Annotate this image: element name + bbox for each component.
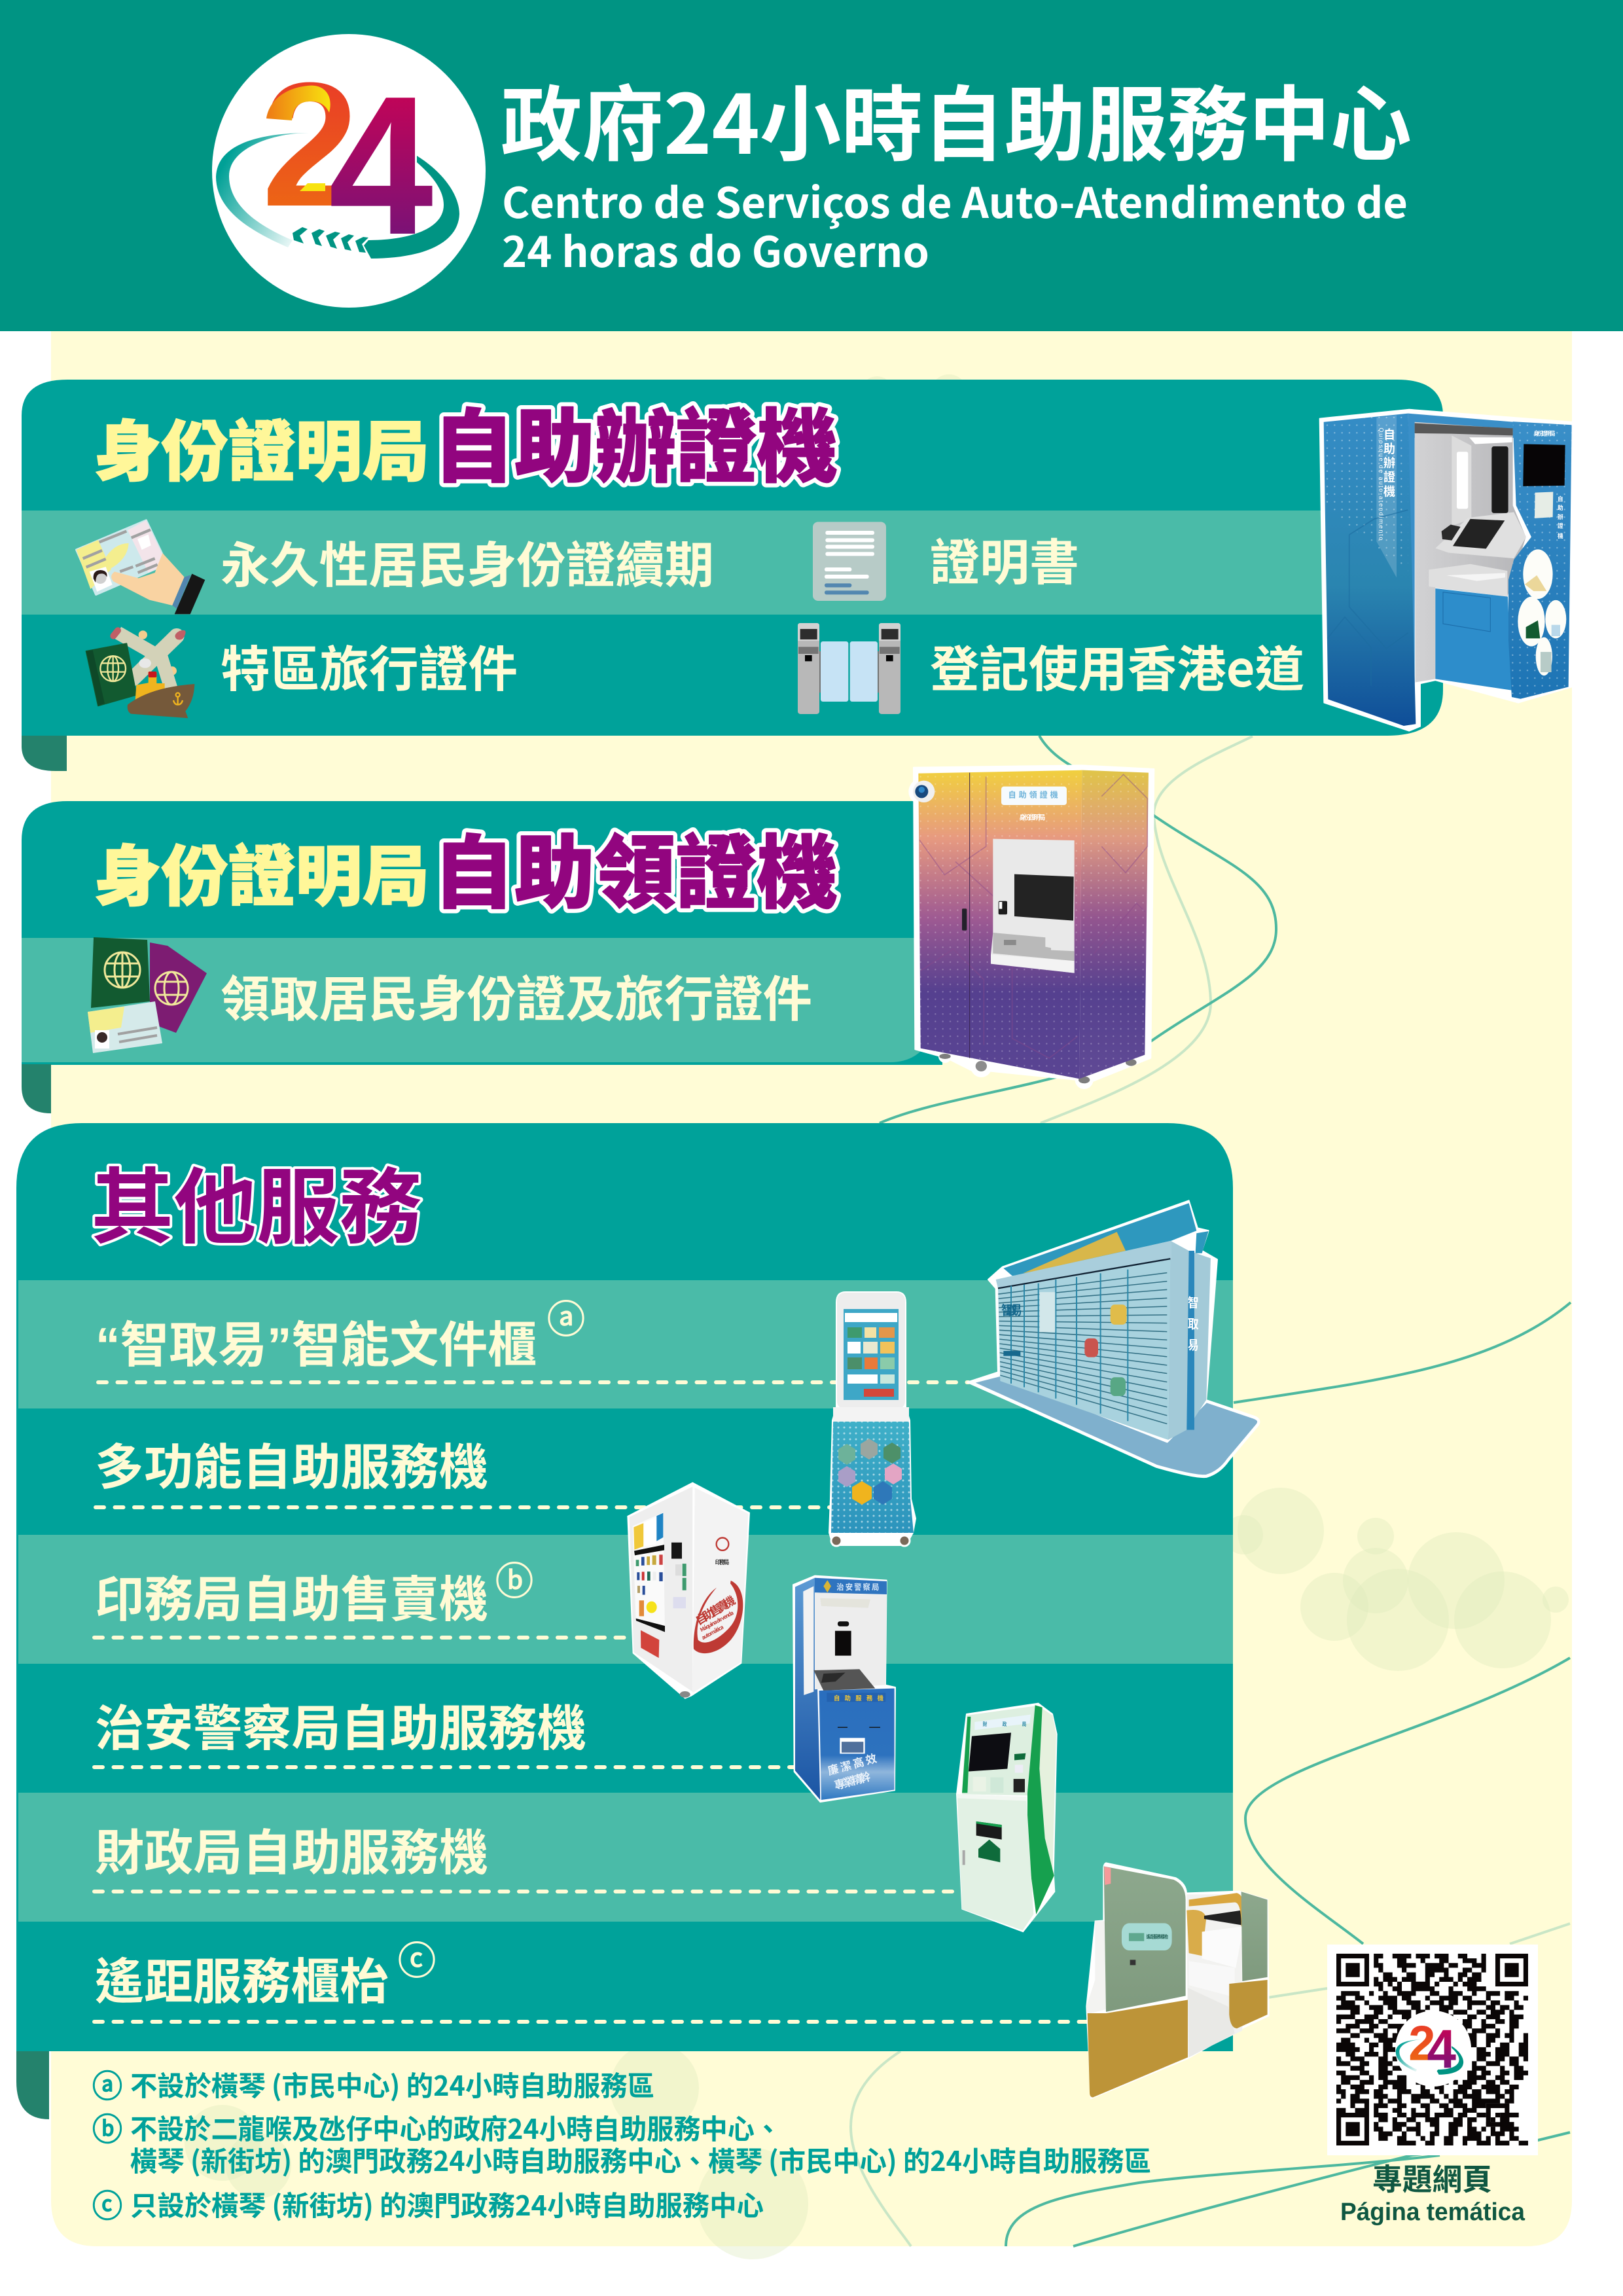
machine: police self-service kiosk: 治安警察局 [836, 1582, 879, 1592]
machine: printing bureau vending machine [627, 1482, 750, 1699]
row text: certificate: 證明書 [930, 523, 1079, 594]
heading: 身份證明局 [94, 824, 429, 920]
machine: finance bureau kiosk [957, 1703, 1057, 1931]
panel: other services [16, 1123, 1233, 2119]
title: 政府24小時自助服務中心 [501, 59, 1412, 177]
QR caption: Página temática [1340, 2198, 1525, 2226]
footnotes [92, 2064, 1151, 2225]
icon: passports and ID card [88, 937, 207, 1053]
machine: blue ID kiosk booth: 助 [1558, 503, 1563, 512]
row: printing bureau vending: 印務局自助售賣機 [95, 1560, 488, 1631]
machine: blue ID kiosk booth: 辦 [1383, 454, 1395, 471]
QR code [1327, 1945, 1538, 2155]
row: smart document locker: ⓐ [547, 1297, 585, 1342]
row: finance bureau kiosk: 財政局自助服務機 [95, 1813, 488, 1884]
row: multifunction kiosk: 多功能自助服務機 [95, 1427, 488, 1499]
footnote b: 橫琴 (新街坊) 的澳門政務24小時自助服務中心、橫琴 (市民中心) 的24小時自助服務區 [130, 2140, 1151, 2179]
row: printing bureau vending: ⓑ [495, 1559, 533, 1604]
machine: blue ID kiosk booth: 自 [1383, 425, 1395, 443]
machine: smart document locker: 易 [1188, 1336, 1199, 1354]
subtitle portuguese [502, 170, 1408, 279]
machine: blue ID kiosk booth: 機 [1383, 482, 1395, 499]
row text: SAR travel document: 特區旅行證件 [221, 630, 518, 701]
heading: 身份證明局 [94, 399, 429, 495]
row: remote service counter: 遙距服務櫃枱 [95, 1942, 389, 2013]
machine: smart document locker: 取 [1188, 1314, 1199, 1333]
heading: 其他服務 [91, 1141, 422, 1261]
footnote b [92, 2108, 1151, 2179]
QR caption: 專題網頁 [1372, 2156, 1492, 2199]
logo circle with 24: 2 [262, 46, 359, 243]
machine: blue ID kiosk booth: Quiosque de auto-atendimento [1378, 427, 1384, 541]
footnote b: 不設於二龍喉及氹仔中心的政府24小時自助服務中心、 [130, 2108, 781, 2147]
icon: travel documents, plane and ship [86, 630, 194, 718]
machine: smart document locker: 智取易 [1001, 1300, 1022, 1319]
machine: multifunction kiosk [829, 1291, 916, 1546]
heading: 自助領證機 [433, 809, 838, 925]
machine: blue ID kiosk booth: 機 [1558, 531, 1563, 540]
footnote c: ⓒ [92, 2188, 122, 2225]
subtitle portuguese: 24 horas do Governo [502, 219, 929, 279]
decorative circles [185, 374, 1569, 2259]
machine: printing bureau vending machine: 自助售賣機 [692, 1592, 738, 1628]
mini 24 logo: 4 [1427, 2018, 1456, 2079]
row: public security police kiosk: 治安警察局自助服務機 [95, 1689, 586, 1760]
row text: collect ID and travel documents: 領取居民身份證及旅行證件 [221, 960, 812, 1031]
cream content panel [51, 331, 1572, 2246]
machine: blue ID kiosk booth [1320, 410, 1572, 731]
QR caption [1340, 2156, 1525, 2226]
machine: purple document collection kiosk [908, 765, 1154, 1089]
list rows with dashed leaders [94, 1297, 1093, 2022]
machine: police self-service kiosk: 自助服務機 [834, 1693, 883, 1702]
heading: 自助辦證機 [433, 383, 838, 499]
machine: blue ID kiosk booth: 辦 [1558, 512, 1563, 521]
subtitle portuguese: Centro de Serviços de Auto-Atendimento de [502, 170, 1408, 230]
panel: document collection kiosk [22, 801, 942, 1113]
header band [0, 0, 1623, 331]
machine: police self-service kiosk: 專業精幹 [832, 1767, 872, 1793]
machine: smart document locker: 智 [1188, 1293, 1199, 1311]
icon: ID card in hand [77, 520, 205, 614]
machine: purple document collection kiosk: 身份證明局 [1019, 812, 1045, 822]
footnote c: 只設於橫琴 (新街坊) 的澳門政務24小時自助服務中心 [130, 2184, 764, 2224]
machine: printing bureau vending machine: Máquina de venda [699, 1609, 735, 1634]
decorative curves [851, 736, 1571, 2246]
mini 24 logo [1396, 2015, 1463, 2079]
machine: printing bureau vending machine: automática [700, 1623, 725, 1641]
machine: finance bureau kiosk: 財政局 [983, 1720, 1026, 1728]
machine: printing bureau vending machine: 印務局 [715, 1558, 729, 1566]
heading [94, 809, 838, 925]
machine: blue ID kiosk booth: 助 [1383, 440, 1395, 457]
machine: blue ID kiosk booth: 證 [1558, 521, 1563, 530]
footnote b: ⓑ [92, 2111, 122, 2148]
row text: permanent ID renewal: 永久性居民身份證續期 [221, 526, 714, 597]
machine: smart document locker [967, 1200, 1258, 1477]
icon: e-channel gates [798, 623, 901, 714]
machine: purple document collection kiosk: 自助領證機 [1008, 789, 1058, 800]
row text: Hong Kong e-channel: 登記使用香港e道 [930, 630, 1304, 701]
machine: remote service counter booth [1086, 1863, 1269, 2099]
logo circle with 24: 4 [329, 55, 435, 276]
heading: 自助領證機 [433, 809, 838, 925]
row: remote service counter: ⓒ [398, 1939, 436, 1983]
machine: remote service counter booth: 遙距服務櫃枱 [1147, 1933, 1168, 1940]
heading: 自助辦證機 [433, 383, 838, 499]
machine: blue ID kiosk booth: 自 [1558, 494, 1563, 503]
footnote a: 不設於橫琴 (市民中心) 的24小時自助服務區 [130, 2064, 654, 2104]
footnote a: ⓐ [92, 2068, 122, 2105]
machine: blue ID kiosk booth: 證 [1383, 468, 1396, 486]
machine: blue ID kiosk booth: 身份證明局 [1533, 429, 1556, 437]
heading [94, 383, 838, 499]
mini 24 logo: 2 [1408, 2015, 1435, 2070]
icon: certificate document [813, 522, 886, 601]
machine: police self-service kiosk [793, 1575, 895, 1802]
logo circle with 24 [212, 34, 486, 308]
machine: police self-service kiosk: 廉潔高效 [826, 1749, 878, 1778]
row: smart document locker: “智取易”智能文件櫃 [96, 1305, 537, 1376]
panel: identification self-service kiosk [22, 380, 1443, 771]
